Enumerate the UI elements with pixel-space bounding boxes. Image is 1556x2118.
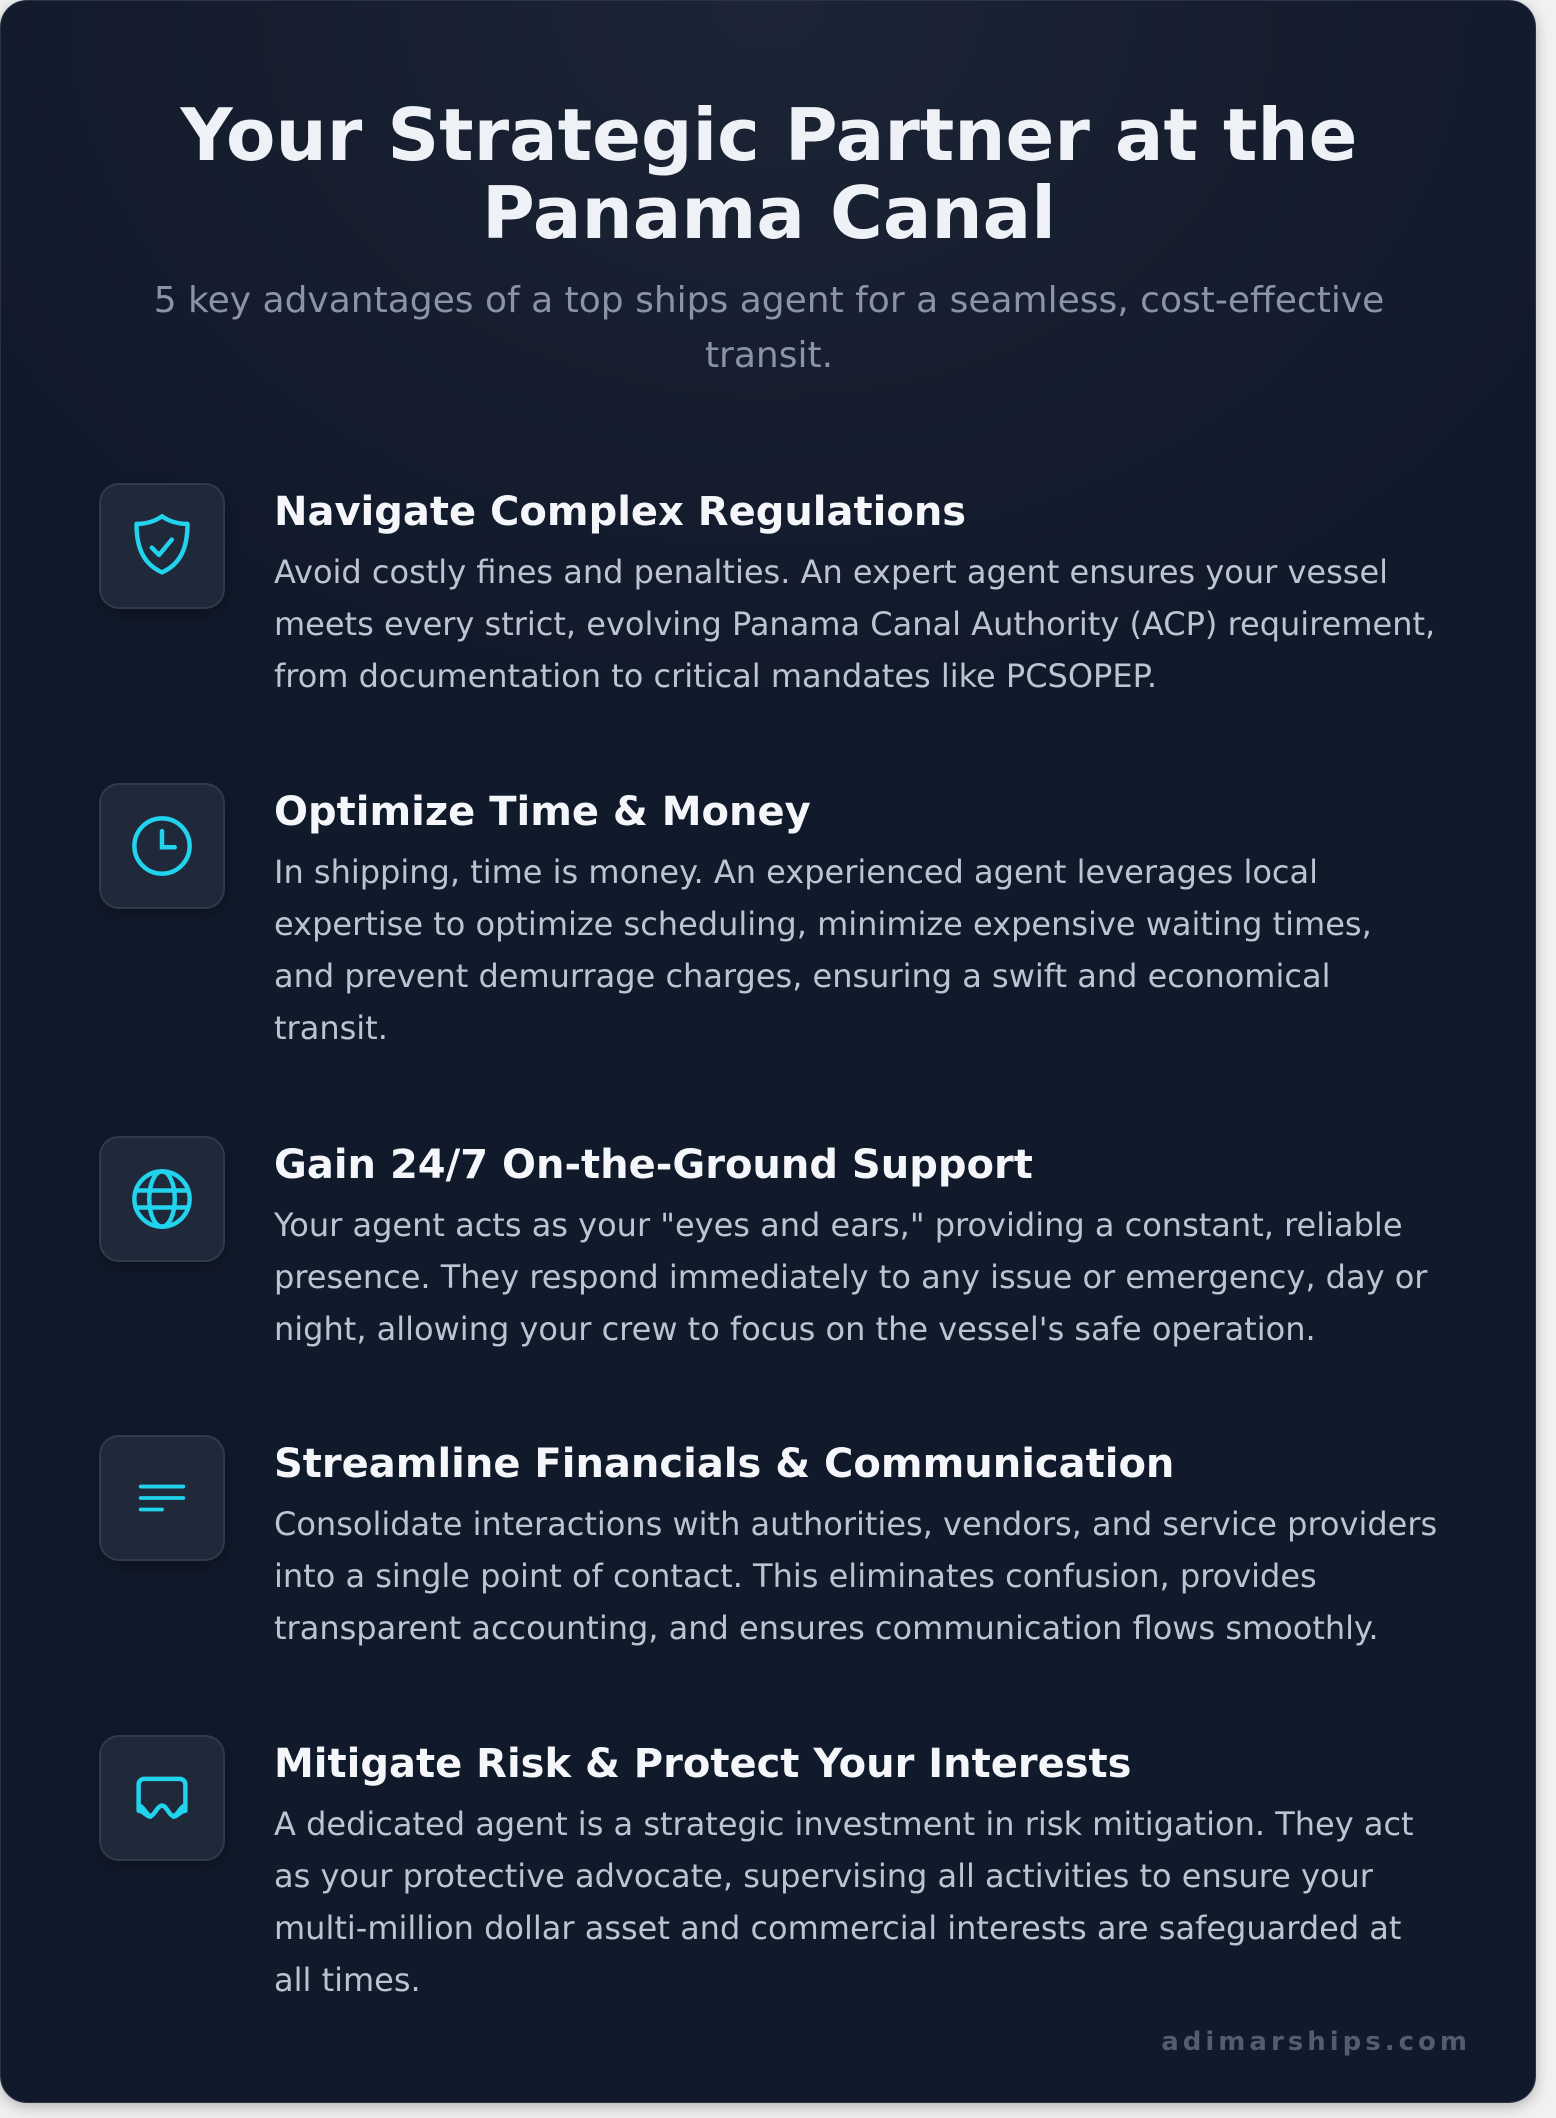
subtitle: transit. [705,335,833,376]
body text: expertise to optimize scheduling, minimize expensive waiting times, [274,905,1372,943]
body text [274,1206,1428,1348]
item: risk [99,1735,1414,1999]
body text: transit. [274,1009,388,1047]
body text: Avoid costly fines and penalties. An expert agent ensures your vessel [274,553,1388,591]
title [180,93,1358,255]
body text: from documentation to critical mandates like PCSOPEP. [274,657,1157,695]
icon: lines [99,1435,225,1561]
footer: website: adimarships.com [1161,2027,1471,2057]
body text [274,553,1435,695]
heading: Streamline Financials & Communication [274,1441,1174,1487]
body text: A dedicated agent is a strategic investment in risk mitigation. They act [274,1805,1414,1843]
body text: night, allowing your crew to focus on the vessel's safe operation. [274,1310,1316,1348]
body text: Consolidate interactions with authorities, vendors, and service providers [274,1505,1437,1543]
body text: In shipping, time is money. An experienced agent leverages local [274,853,1318,891]
body text: and prevent demurrage charges, ensuring a swift and economical [274,957,1330,995]
body text [274,853,1372,1047]
body text: meets every strict, evolving Panama Canal Authority (ACP) requirement, [274,605,1435,643]
title: Panama Canal [482,171,1056,255]
body text: transparent accounting, and ensures communication flows smoothly. [274,1609,1379,1647]
body text: as your protective advocate, supervising all activities to ensure your [274,1857,1373,1895]
icon: vessel [99,1735,225,1861]
body text [274,1505,1437,1647]
body text: into a single point of contact. This eliminates confusion, provides [274,1557,1317,1595]
body text: presence. They respond immediately to any issue or emergency, day or [274,1258,1427,1296]
subtitle [154,280,1384,376]
icon: globe [99,1136,225,1262]
heading: Gain 24/7 On-the-Ground Support [274,1142,1033,1188]
item: time & money [99,783,1372,1047]
icon: clock [99,783,225,909]
body text [274,1805,1414,1999]
title: Your Strategic Partner at the [180,93,1358,177]
heading: Navigate Complex Regulations [274,489,966,535]
item: support [99,1136,1428,1348]
subtitle: 5 key advantages of a top ships agent for a seamless, cost-effective [154,280,1384,321]
body text: all times. [274,1961,421,1999]
body text: Your agent acts as your "eyes and ears," providing a constant, reliable [274,1206,1402,1244]
heading: Optimize Time & Money [274,789,811,835]
heading: Mitigate Risk & Protect Your Interests [274,1741,1131,1787]
item: financials [99,1435,1437,1647]
icon: shield check [99,483,225,609]
body text: multi-million dollar asset and commercial interests are safeguarded at [274,1909,1401,1947]
item: regulations [99,483,1435,695]
